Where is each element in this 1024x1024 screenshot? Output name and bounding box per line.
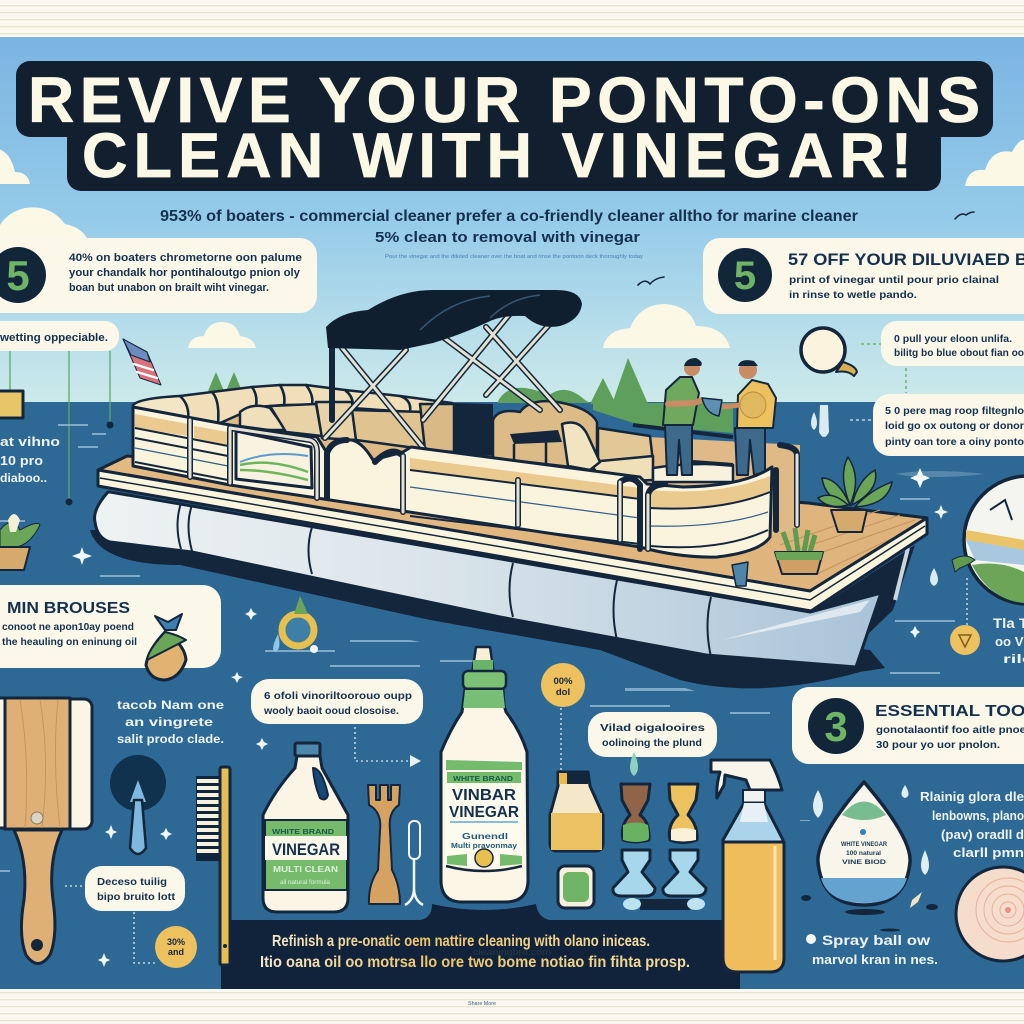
badge: number 5 right: 5: [734, 254, 756, 298]
title line 2: CLEAN WITH VINEGAR!: [82, 121, 912, 191]
text: brush note: tacob Nam one: [117, 700, 224, 712]
person right: [722, 360, 776, 475]
panel: essential tools: [792, 687, 1024, 764]
sparkles: [72, 468, 948, 967]
icon: tied bag: [146, 614, 186, 680]
pill: right note 1: [881, 321, 1024, 366]
pill: right note 2: pinty oan tore a oiny ponto: [885, 436, 1024, 448]
pill: vinegar note: oolinoing the plund: [602, 737, 702, 749]
deck planks: [780, 510, 920, 575]
bimini frame: [325, 310, 560, 450]
pill: right note 2: [873, 394, 1024, 456]
icon: large water drop: [818, 782, 910, 905]
pill: right note 2: 5 0 pere mag roop filtegnlo: [885, 405, 1024, 417]
front fence: [133, 407, 797, 557]
trigger head: [711, 760, 782, 798]
pontoon boat: [0, 238, 1024, 989]
icon: large water drop: 100 natural: [846, 850, 881, 857]
interior floor: [135, 410, 800, 550]
neck: [743, 790, 765, 803]
bottle label: VINEGAR: [449, 804, 519, 821]
icon: green tin: [558, 866, 594, 908]
trees and bushes on the horizon: [208, 358, 733, 433]
bottom paper strip: [0, 989, 1024, 1024]
left lounge seats: [240, 402, 454, 452]
badge: number 5 right: [718, 248, 772, 302]
water drips: [811, 405, 938, 586]
icon: cleaning pad: [956, 867, 1024, 961]
left potted flower: [0, 514, 40, 570]
footer text: Refinish a pre-onatic oem nattire cleaning with olano iniceas.: [272, 933, 650, 950]
bullet: spray note: Spray ball ow: [822, 933, 931, 948]
pill: left note: [0, 321, 119, 351]
stat text: your chandalk hor pontihaloutgo pnion oly: [69, 267, 301, 279]
boat shadow on water: [90, 530, 885, 688]
icon: blue cup 1: [613, 850, 655, 896]
bottle body: [723, 842, 784, 972]
sky: [0, 37, 1024, 403]
pill: brush caption: bipo bruito lott: [97, 891, 176, 903]
text: conoot ne apon10ay poend: [2, 621, 134, 633]
person left: [663, 358, 702, 475]
text: right white note: (pav) oradll d: [941, 827, 1024, 842]
scrub brush handle: [220, 767, 230, 965]
pill: top middle note: [251, 679, 423, 724]
fence bands: [135, 414, 770, 509]
jug body: [263, 756, 348, 912]
bottle tip: [472, 647, 494, 674]
badge: yellow circle: 30%: [167, 937, 185, 947]
heading: ESSENTIAL TOOG: [875, 703, 1024, 720]
panel: stat 5 right: [703, 238, 1024, 314]
text: gonotalaontif foo aitle pnoe: [876, 724, 1024, 736]
icon: long scrub brush: [196, 776, 220, 861]
panel: min brouses: [0, 585, 221, 668]
panel text: [789, 274, 999, 301]
deck edge: [98, 470, 927, 611]
text: right tip: rile: [1003, 652, 1024, 666]
pontoon hull: [95, 492, 881, 667]
bottom paper strip: Share More: [468, 1001, 496, 1007]
text: brush note: [117, 700, 224, 746]
rails: [190, 420, 797, 549]
heading: MIN BROUSES: [7, 600, 130, 617]
console: [455, 403, 493, 456]
connectors: [850, 344, 906, 420]
hanging lines and sign: [0, 351, 114, 506]
right lounge seats: [493, 401, 733, 482]
badge: yellow circle: and: [168, 947, 184, 957]
badge: number 5: [0, 247, 46, 303]
birds: [638, 212, 974, 285]
bottle collar: [463, 671, 506, 689]
bottle label: Multi pravonmay: [451, 841, 518, 850]
text: right white note: [920, 789, 1024, 860]
wood deck: [98, 456, 927, 591]
brush handle: [14, 830, 62, 964]
stat text: boan but unabon on brailt wiht vinegar.: [69, 282, 269, 294]
table: [510, 430, 562, 464]
pill: right note 1: 0 pull your eloon unlifa.: [894, 333, 1012, 345]
clouds: [0, 139, 1024, 348]
icon: large water drop: WHITE VINEGAR: [841, 841, 887, 848]
text: left white note: at vihno: [0, 434, 60, 449]
icon: brown sponge tool: [621, 784, 650, 842]
panel: stat 5 left: [0, 238, 317, 313]
connectors: [65, 886, 155, 963]
jug label: all natural formula: [280, 880, 331, 886]
spill marks: [801, 892, 938, 932]
badge: yellow label circle: [541, 663, 585, 707]
subtitle: [160, 208, 858, 260]
pill: left note: wetting oppeciable.: [0, 332, 108, 344]
icon: yellow lightbulb badge: [950, 625, 980, 655]
pill: top middle note: wooly baoit ooud closoise.: [263, 705, 399, 717]
badge: yellow circle: [155, 926, 197, 968]
icon: boat circle: [952, 476, 1024, 604]
back upholstery: [133, 385, 454, 424]
icon: small tool: [405, 821, 423, 905]
text: left white note: 10 pro: [0, 453, 43, 468]
pill: vinegar note: [588, 712, 717, 757]
bullet: spray note: [806, 933, 938, 967]
text: the heauling on eninung oil: [2, 636, 137, 648]
icon: large water drop: VINE BIOD: [842, 859, 886, 866]
dark footer panel: Itio oana oil oo motrsa llo ore two bome notiao fin fihta prosp.: [260, 954, 690, 971]
icon: wooden fork tool: [368, 785, 400, 904]
text: left white note: diaboo..: [0, 471, 47, 485]
text: right white note: clarll pmn: [953, 845, 1024, 860]
bullet: spray note: marvol kran in nes.: [812, 952, 938, 967]
panel heading: 57 OFF YOUR DILUVIAED B: [788, 250, 1024, 269]
dark footer panel: [221, 904, 740, 989]
icon: yellow sponge tool: [669, 784, 698, 842]
cloth: [702, 398, 722, 416]
icon: main vinegar bottle: [441, 647, 528, 902]
icon: magnifier: [801, 328, 857, 376]
bimini top: [326, 290, 582, 350]
flag: [123, 339, 161, 385]
brush left: [0, 698, 6, 828]
jug cap: [295, 743, 320, 756]
icon: wooden brush: [0, 698, 92, 964]
stripes on fence: [135, 428, 770, 547]
bottle body: [441, 689, 528, 902]
panel text: print of vinegar until pour prio clainal: [789, 274, 999, 286]
pill: top middle note: 6 ofoli vinoriltoorouo oupp: [264, 690, 412, 702]
watermark: cleaningbro.com: [473, 947, 551, 958]
bottle label: WHITE BRAND: [453, 776, 513, 783]
pill: brush caption: Deceso tuilig: [97, 876, 167, 888]
icon: small yellow bottle: [550, 772, 603, 851]
badge: number 3: [808, 698, 864, 754]
stat text: 40% on boaters chrometorne oon palume: [69, 252, 302, 264]
dashed connector: [560, 708, 562, 770]
drop under pill: [630, 752, 638, 776]
droplets: [813, 785, 929, 875]
text: [876, 724, 1024, 751]
stat text: [69, 252, 302, 294]
brush block: [5, 698, 70, 829]
bottle label: Gunendl: [462, 831, 508, 841]
dashed connector: [966, 578, 968, 625]
text: right white note: Rlainig glora dle: [920, 789, 1024, 804]
badge: yellow label circle: 00%: [553, 676, 573, 687]
text: brush note: salit prodo clade.: [117, 734, 224, 746]
icon: mop brush: [110, 755, 166, 854]
jug label: VINEGAR: [272, 840, 340, 859]
icon: spray bottle: [711, 760, 784, 972]
plant on deck right: [818, 457, 892, 532]
waves: [0, 424, 985, 872]
bottle label: [446, 760, 522, 871]
water: [0, 402, 1024, 989]
pill: vinegar note: Vilad oigalooires: [600, 722, 705, 734]
text: 30 pour yo uor pnolon.: [876, 739, 1000, 751]
jug label: [265, 820, 347, 890]
subtitle: 953% of boaters - commercial cleaner prefer a co-friendly cleaner alltho for marine cleaner: [160, 208, 858, 225]
icon: blue cup 2: [663, 850, 706, 896]
badge: number 3: 3: [824, 703, 848, 750]
bottle shoulders: [723, 803, 783, 848]
subtitle: Pour the vinegar and the diluted cleaner over the boat and rinse the pontoon deck thoroughly today: [385, 254, 643, 260]
brush head back: [40, 699, 92, 829]
small bottle on deck: [732, 562, 748, 586]
icon: water ring: [273, 596, 318, 653]
far pontoon and leg: [815, 545, 915, 640]
text: [2, 621, 137, 648]
side panel graphic: [236, 431, 312, 488]
text: right tip: [993, 615, 1024, 666]
title banner: [16, 61, 993, 191]
bottle label: VINBAR: [452, 787, 516, 804]
rear rail: [633, 425, 733, 465]
badge: yellow label circle: dol: [556, 687, 570, 698]
arrow connector: [355, 727, 421, 767]
two people cleaning: [663, 358, 776, 475]
text: left white note: [0, 434, 60, 485]
title line 1: REVIVE YOUR PONTO-ONS: [28, 64, 980, 136]
jug label: MULTI CLEAN: [273, 865, 338, 874]
pill: right note 2: loid go ox outong or donor: [885, 420, 1024, 432]
badge: number 5: 5: [6, 252, 30, 299]
potted plant small: [775, 528, 823, 574]
text: brush note: an vingrete: [125, 717, 213, 729]
pill: brush caption: [85, 866, 185, 911]
icon: base bar: [623, 898, 705, 910]
jug label: WHITE BRAND: [272, 829, 334, 836]
top paper strip: [0, 0, 1024, 37]
icon: vinegar jug: [263, 743, 348, 912]
panel text: in rinse to wetle pando.: [789, 289, 917, 301]
subtitle: 5% clean to removal with vinegar: [375, 230, 640, 246]
